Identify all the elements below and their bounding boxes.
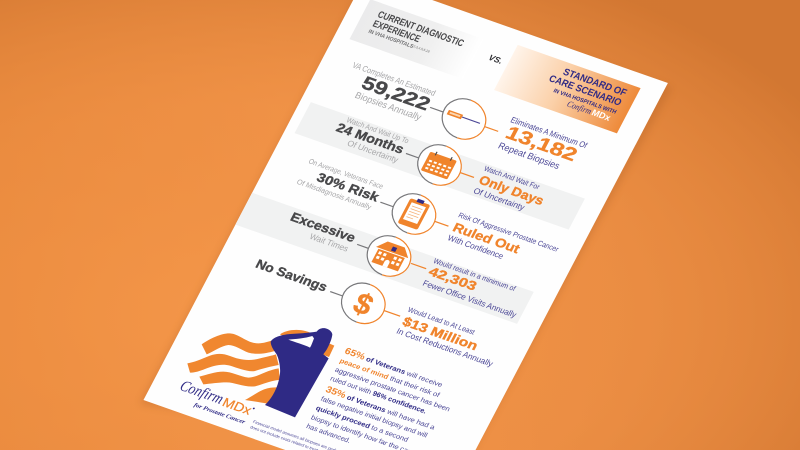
logo: ConfirmMDx for Prostate Cancer: MDx [220, 395, 255, 418]
right stat: Risk Of Aggressive Prostate Cancer [457, 211, 561, 254]
right stat [445, 211, 561, 276]
flag stripes [187, 330, 334, 404]
left stat: Wait Times [308, 231, 350, 253]
icon: building [348, 227, 435, 287]
right stat: Repeat Biopsies [496, 141, 562, 172]
row 2: wait time [327, 110, 553, 220]
text block: veterans paragraph: 35% of Veterans will have had a [323, 384, 437, 432]
text block: veterans paragraph: ruled out with 96% confidence. [329, 376, 428, 415]
icon: biopsy needle [421, 89, 508, 149]
right stat: Only Days [476, 172, 547, 208]
panel: current diagnostic header [349, 0, 484, 79]
heading: standard of care scenario: CARE SCENARIO [547, 74, 623, 109]
left stat: 59,222 [358, 73, 434, 115]
left stat: Of Uncertainty [346, 138, 401, 165]
right stat: $13 Million [400, 314, 481, 353]
band: row 4 [235, 193, 534, 324]
right stat [395, 305, 507, 369]
heading: standard of care scenario: STANDARD OF [561, 67, 628, 99]
left stat: Biopsies Annually [353, 90, 423, 123]
row 5: cost [246, 247, 509, 370]
row 1: biopsies [337, 59, 590, 178]
left stat: Of Misdiagnosis Annually [295, 177, 373, 211]
left stat: No Savings [253, 256, 330, 294]
left stat: On Average, Veterans Face [307, 157, 385, 191]
left stat [330, 114, 411, 165]
right stat: Would result in a minimum of [432, 256, 518, 293]
logo: ConfirmMDx for Prostate Cancer: for Prostate Cancer [193, 403, 247, 426]
right stat [495, 115, 590, 177]
logo: ConfirmMDx small [565, 99, 613, 123]
veteran silhouette [265, 328, 332, 417]
left stat: VA Completes An Estimated [351, 60, 438, 98]
icon: calendar [397, 135, 484, 195]
heading: current diagnostic experience: CURRENT DIAGNOSTIC [375, 10, 466, 49]
right stat: With Confidence [446, 233, 506, 261]
panel: standard of care header [494, 45, 641, 133]
left stat: 30% Risk [314, 170, 383, 205]
left stat [337, 60, 438, 124]
icon: dollar [321, 274, 410, 334]
text block: veterans paragraph: false negative initial biopsy and will [319, 396, 429, 440]
right stat [471, 164, 551, 217]
right stat [420, 256, 530, 320]
left stat: 24 Months [334, 120, 407, 157]
icon: dollar: $ [348, 287, 379, 322]
right stat: Would Lead to At Least [406, 305, 477, 337]
left stat: Excessive [288, 209, 358, 245]
subheading: 2,3,4,5,6,18 [413, 44, 431, 54]
vs label: VS. [487, 52, 505, 66]
row 3: risk [292, 156, 561, 281]
band: row 2 [295, 102, 585, 230]
subheading: IN VHA HOSPITALS [367, 29, 418, 51]
icon: clipboard [371, 184, 458, 244]
subheading: IN VHA HOSPITALS WITH [552, 88, 617, 116]
logo: ConfirmMDx for Prostate Cancer: Confirm [177, 378, 226, 408]
illustration: flag and saluting veteran [187, 328, 334, 417]
text block: veterans paragraph: 65% of Veterans will receive [342, 346, 445, 390]
right stat: Watch And Wait For [482, 164, 542, 191]
right stat: Ruled Out [450, 220, 523, 256]
infographic page [143, 0, 668, 450]
text block: veterans paragraph: has advanced. [305, 423, 352, 445]
page shadow [140, 0, 672, 450]
logo: ConfirmMDx small: MDx [590, 108, 613, 123]
row 4: office visits [279, 203, 533, 321]
right stat: Of Uncertainty [472, 186, 527, 212]
left stat [295, 157, 387, 212]
salute arm gap [288, 336, 314, 348]
text block: veterans paragraph [306, 348, 450, 450]
logo: ConfirmMDx for Prostate Cancer [173, 378, 257, 426]
right stat: Fewer Office Visits Annually [421, 278, 519, 320]
left stat [283, 209, 358, 254]
footnote [250, 420, 336, 450]
heading: current diagnostic experience: EXPERIENCE [371, 19, 422, 45]
right stat: 42,303 [426, 264, 479, 293]
right stat: In Cost Reductions Annually [395, 326, 496, 369]
text block: veterans paragraph: peace of mind that their risk of [338, 358, 441, 399]
left stat: Watch And Wait Up To [345, 116, 411, 145]
right stat: Eliminates A Minimum Of [509, 115, 590, 150]
text block: veterans paragraph: quickly proceed to a second [314, 405, 409, 444]
logo: ConfirmMDx small: Confirm [565, 99, 594, 116]
right stat: 13,182 [502, 123, 580, 166]
text block: veterans paragraph: aggressive prostate cancer has been [333, 367, 451, 413]
